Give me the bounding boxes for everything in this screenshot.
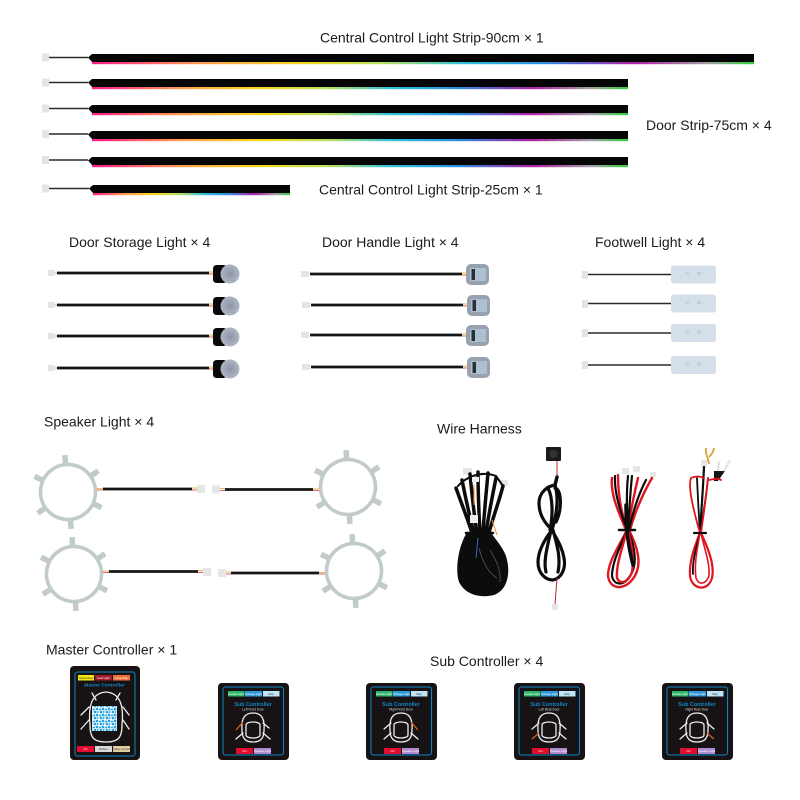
- label: sub controller: Sub Controller × 4: [430, 653, 543, 669]
- sub controller 4: CH: [686, 749, 691, 753]
- door storage lights: [48, 264, 240, 378]
- door storage light 2: [48, 296, 240, 316]
- label: door strip: Door Strip-75cm × 4: [646, 117, 772, 133]
- master controller: Street Beat: [79, 676, 93, 680]
- sub controller 4: Speaker Light: [698, 749, 715, 753]
- speaker cable 3: [103, 568, 211, 576]
- speaker lights: [19, 440, 402, 621]
- speaker cable 1: [97, 485, 205, 493]
- sub controller 3: Speaker Light: [550, 749, 567, 753]
- sub controller 3: Storage Light: [541, 692, 558, 696]
- strip: door 3: [42, 130, 628, 141]
- sub controller 4: Sub Controller: [678, 702, 717, 708]
- door handle light 4: [302, 357, 490, 378]
- sub controller 1: Strip: [268, 692, 274, 696]
- footwell lights: [582, 266, 716, 374]
- master controller: CH: [83, 747, 88, 751]
- label: master controller: Master Controller × 1: [46, 642, 177, 658]
- sub controller 3: Handle Light: [524, 692, 540, 696]
- sub controller 4: [662, 683, 733, 760]
- speaker ring 3: [26, 527, 122, 621]
- sub controller 2: [366, 683, 437, 760]
- sub controller 4: Strip: [712, 692, 718, 696]
- footwell light 2: [582, 294, 716, 312]
- sub controller 1: CH: [242, 749, 247, 753]
- sub controller 1: Storage Light: [245, 692, 262, 696]
- label: speaker light: Speaker Light × 4: [44, 414, 154, 430]
- sub controller 2: Strip: [416, 692, 422, 696]
- door handle light 3: [301, 325, 489, 346]
- sub controller 2: CH: [390, 749, 395, 753]
- strip: door 1: [42, 78, 628, 89]
- master controller: Foot Light: [97, 676, 110, 680]
- strip: central control 25cm: [42, 184, 290, 195]
- strip: central control 90cm: [42, 54, 754, 64]
- sub controller 2: Speaker Light: [402, 749, 419, 753]
- door storage light 4: [48, 360, 240, 378]
- sub controller 2: Sub Controller: [382, 702, 421, 708]
- label: door storage light: Door Storage Light × 4: [69, 234, 210, 250]
- sub controller 1: Speaker Light: [254, 749, 271, 753]
- power cable bundle: [690, 448, 730, 588]
- door storage light 3: [48, 328, 240, 346]
- label: footwell light: Footwell Light × 4: [595, 234, 705, 250]
- speaker cable 2: [212, 486, 319, 494]
- master controller: Long Strip: [115, 676, 128, 680]
- main harness bundle: [456, 468, 508, 596]
- strip: door 4: [42, 156, 628, 167]
- sub controller 1: [218, 683, 289, 760]
- wire harness bundles: [456, 447, 730, 610]
- door handle lights: [301, 264, 490, 378]
- speaker cable 4: [218, 569, 325, 577]
- sub controller 1: Handle Light: [228, 692, 244, 696]
- speaker ring 4: [306, 524, 402, 618]
- speaker ring 2: [300, 440, 396, 534]
- sub controller 2: Right Front Door: [389, 708, 414, 712]
- sub controller 3: Strip: [564, 692, 570, 696]
- footwell light 1: [582, 266, 716, 284]
- speaker ring 1: [19, 445, 117, 539]
- master controller: [70, 666, 140, 760]
- sub controller 4: Right Rear Door: [685, 708, 709, 712]
- sub controller 4: Handle Light: [672, 692, 688, 696]
- sub controller 3: Left Rear Door: [539, 708, 560, 712]
- label: door handle light: Door Handle Light × 4: [322, 234, 459, 250]
- sub controller 3: CH: [538, 749, 543, 753]
- label: central control strip 90cm: Central Control Light Strip-90cm × 1: [320, 30, 544, 46]
- sub controller 4: Storage Light: [689, 692, 706, 696]
- sub controller 2: Handle Light: [376, 692, 392, 696]
- footwell light 4: [582, 356, 716, 374]
- sub controller 3: [514, 683, 585, 760]
- sub controller 1: Sub Controller: [234, 702, 273, 708]
- master controller: Button: [99, 747, 108, 751]
- master controller: Voice Control: [113, 747, 130, 751]
- door handle light 1: [301, 264, 489, 285]
- sub controller 1: Left Front Door: [242, 708, 265, 712]
- door storage light 1: [48, 264, 240, 284]
- strip: door 2: [42, 104, 628, 115]
- master controller: Master Controller: [84, 682, 125, 688]
- sub controller 3: Sub Controller: [530, 702, 569, 708]
- footwell light 3: [582, 324, 716, 342]
- switch cable bundle: [538, 447, 565, 610]
- red-black cable bundle: [608, 466, 656, 587]
- door handle light 2: [302, 295, 490, 316]
- sub controller 2: Storage Light: [393, 692, 410, 696]
- label: wire harness: Wire Harness: [437, 420, 522, 436]
- label: central control strip 25cm: Central Control Light Strip-25cm × 1: [319, 182, 543, 198]
